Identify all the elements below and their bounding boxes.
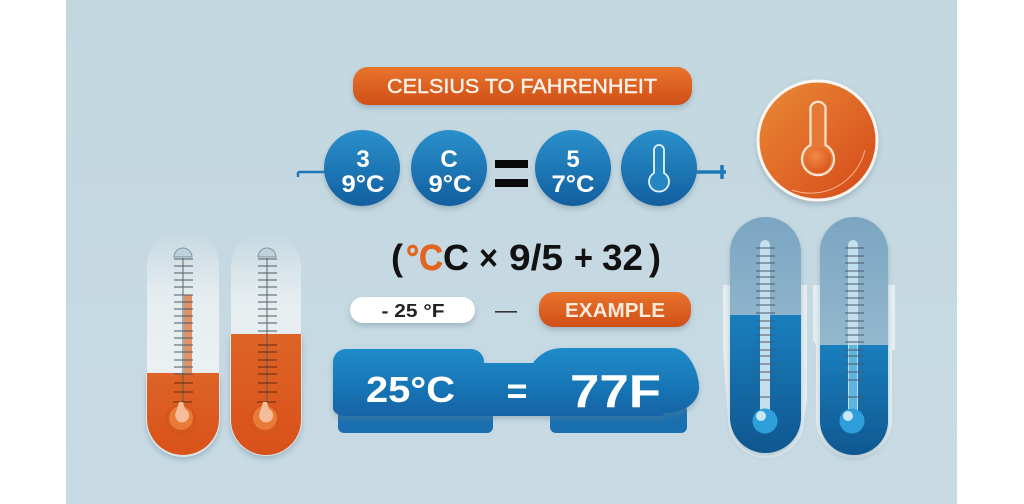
example pill: EXAMPLE	[565, 300, 665, 322]
formula: C	[443, 237, 469, 278]
circle: C 9°C: 9°C	[428, 171, 472, 198]
circle: C 9°C	[411, 130, 487, 206]
result banner: =	[506, 370, 528, 411]
blue thermometer 2	[813, 217, 895, 460]
orange thermometer 2	[225, 232, 305, 459]
equals sign	[495, 160, 528, 187]
title banner	[353, 67, 692, 105]
circle: 3 9°C: 9°C	[342, 171, 384, 198]
result banner	[333, 348, 699, 433]
right connector	[690, 165, 726, 179]
circle: thermometer icon	[621, 130, 697, 206]
formula: (	[391, 237, 403, 278]
result banner: 77F	[570, 365, 661, 417]
formula: )	[649, 237, 661, 278]
title banner: CELSIUS TO FAHRENHEIT	[387, 76, 657, 98]
formula	[391, 237, 661, 278]
orange thermometer 1	[144, 248, 222, 462]
orange thermometer badge	[756, 80, 878, 202]
result banner: 25°C	[366, 369, 455, 410]
left connector	[298, 172, 330, 177]
formula: °C	[406, 237, 443, 278]
formula: 32	[602, 237, 643, 278]
dash	[495, 311, 517, 313]
pill: -25 °F: - 25 °F	[382, 301, 444, 321]
example pill	[539, 292, 691, 327]
circle: 3 9°C: 3	[356, 146, 370, 173]
circle: 3 9°C	[324, 130, 400, 206]
circle: C 9°C: C	[440, 146, 458, 173]
circle: 5 7°C: 7°C	[552, 171, 594, 198]
circle: 5 7°C	[535, 130, 611, 206]
formula: ×	[479, 237, 498, 278]
formula: +	[574, 237, 593, 278]
blue thermometer 1	[723, 217, 807, 458]
formula: 9/5	[509, 237, 563, 278]
circle: 5 7°C: 5	[566, 146, 580, 173]
pill: -25 °F	[350, 297, 475, 323]
